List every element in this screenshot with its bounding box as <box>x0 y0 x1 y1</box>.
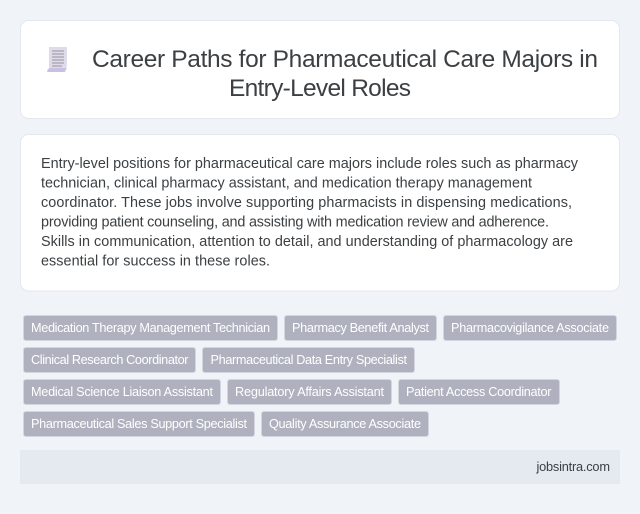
tag: Regulatory Affairs Assistant <box>235 385 384 399</box>
tag: Pharmaceutical Data Entry Specialist <box>210 353 407 367</box>
tag: Quality Assurance Associate <box>269 417 421 431</box>
tag <box>284 316 436 340</box>
panel: description <box>20 134 620 291</box>
tag <box>202 348 414 372</box>
text block: description <box>41 156 579 270</box>
tag: Medical Science Liaison Assistant <box>31 385 213 399</box>
tag <box>24 316 278 340</box>
tag <box>444 316 616 340</box>
tag <box>24 380 220 404</box>
tag group: career roles <box>24 316 616 436</box>
text block: description: Skills in communication, attention to detail, and understanding of pharmacology are <box>41 234 573 250</box>
icon: document <box>47 47 67 72</box>
tag: Clinical Research Coordinator <box>31 353 189 367</box>
footer <box>20 450 620 484</box>
text block: description: Entry-level positions for pharmaceutical care majors include roles such as pharmacy <box>41 156 579 172</box>
text block: description: essential for success in these roles. <box>41 254 270 270</box>
footer: jobsintra.com <box>536 459 610 474</box>
tag <box>228 380 392 404</box>
text block: description: providing patient counseling, and assisting with medication review and adherence. <box>41 214 549 230</box>
text block: description: coordinator. These jobs involve supporting pharmacists in dispensing medications, <box>41 195 572 211</box>
title: Entry-Level Roles <box>229 75 411 102</box>
title: Career Paths for Pharmaceutical Care Majors in <box>92 46 598 73</box>
tag: Pharmaceutical Sales Support Specialist <box>31 417 247 431</box>
tag: Medication Therapy Management Technician <box>31 321 270 335</box>
panel: title header <box>20 20 620 118</box>
text block: description: technician, clinical pharmacy assistant, and medication therapy management <box>41 176 532 192</box>
title <box>92 46 598 102</box>
tag: Patient Access Coordinator <box>406 385 552 399</box>
tag <box>398 380 560 404</box>
tag: Pharmacovigilance Associate <box>451 321 609 335</box>
tag <box>262 412 428 436</box>
tag <box>24 348 196 372</box>
tag <box>24 412 254 436</box>
tag: Pharmacy Benefit Analyst <box>292 321 429 335</box>
